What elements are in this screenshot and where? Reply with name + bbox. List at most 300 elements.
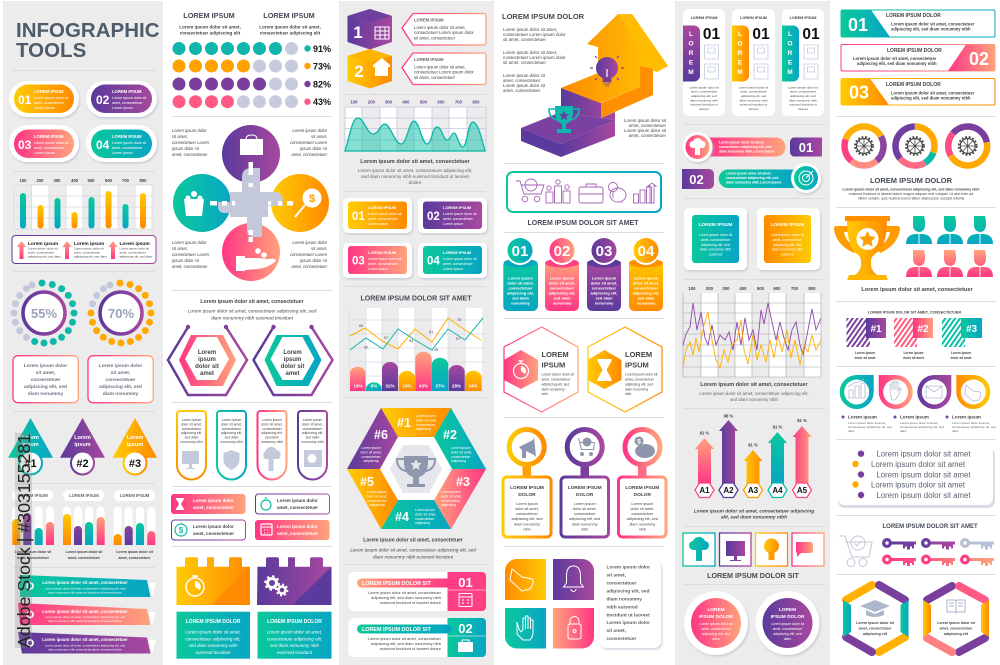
brick cards: Lorem ipsum dolor sit amet, [185, 630, 241, 634]
square note cards: Lorem ipsum dolor sit [699, 233, 732, 237]
label tags: Lorem ipsum dolor [193, 524, 234, 529]
segmented hexagon: dolor sit amet, [366, 494, 388, 498]
circle cards: diam [784, 637, 791, 641]
three lorem tab cards: L [738, 31, 742, 38]
triangle badges: Lorem [22, 435, 39, 441]
heading and text: stair arrow: Lorem ipsum dolor sit [503, 73, 546, 78]
square note cards: diam nonummy nibh [772, 248, 803, 252]
four circle puzzle diagram: ipsum dolor sit [172, 146, 200, 151]
text boxes: diam nonummy [103, 391, 139, 397]
zigzag line chart: 500 [757, 286, 765, 291]
panel: three arrow notes: amet, consectetuer [74, 250, 100, 254]
four icon tiles with text: nibh euismod [606, 604, 638, 610]
segmented hexagon: dolor sit amet, [415, 512, 436, 516]
outlined hexagon cards: diam nonummy [625, 388, 648, 392]
icon strip [507, 172, 661, 212]
icon: hand [236, 248, 276, 271]
heading and text: stair arrow: Lorem ipsum dolor sit amet, [503, 50, 557, 55]
triangle badges: #3 [129, 458, 141, 470]
capsule cards: dolor sit amet, [302, 422, 323, 426]
four circle puzzle diagram: Lorem ipsum dolor [172, 240, 207, 245]
text block: line chart caption: Lorem ipsum dolor sit amet, consectetuer [700, 382, 809, 388]
bullet list panel: Lorem ipsum dolor sit amet [876, 491, 971, 500]
hatched number tags: dolor sit amet [855, 356, 876, 360]
bullet list panel: Lorem ipsum dolor sit amet [876, 450, 971, 458]
cylinder cards: nonummy [511, 300, 531, 306]
segmented hexagon: adipiscing [451, 459, 466, 463]
pill 02: Lorem ipsum [112, 106, 133, 110]
three lorem tab cards: R [738, 50, 743, 57]
icon: presentation board [726, 541, 745, 561]
numbered list cards: Lorem ipsum dolor sit amet, consectetuer [368, 636, 442, 641]
cubes with callouts: sit amet, consectetuer [414, 75, 456, 80]
hatched number tags: Lorem ipsum [903, 351, 924, 355]
circle cards: amet, consectetuer [773, 627, 803, 631]
combined bar and line chart: 65 [359, 324, 363, 328]
donut gear charts [837, 119, 995, 173]
three lorem tab cards: laoreet [749, 107, 758, 111]
icon: piggy bank [634, 436, 655, 458]
four circle puzzle diagram: Lorem ipsum dolor [172, 128, 207, 133]
pill 04 [86, 125, 157, 162]
capsule cards: nonummy nibh [261, 440, 283, 444]
dot ring gauge 55%: 55% [31, 306, 57, 321]
combined bar and line chart: 37% [435, 384, 445, 388]
progress bar groups: Lorem ipsum dolor sit [116, 550, 154, 554]
progress bar groups [12, 490, 155, 560]
outlined hexagon cards: adipiscing elit, sed [542, 382, 569, 386]
numbered list cards: adipiscing elit, sed diam nonummy nibh [371, 641, 441, 646]
combined bar and line chart: 50 [364, 346, 368, 350]
pill 01: Lorem ipsum dolor sit [34, 96, 68, 100]
square note cards: adipiscing elit, sed [773, 243, 802, 247]
heading and text: stair arrow: Lorem ipsum dolor sit [624, 118, 667, 123]
numbered list cards: euismod tincidunt ut laoreet dolore [380, 600, 442, 605]
three lorem tab cards: 01 [703, 26, 720, 43]
segmented hexagon: Lorem ipsum [451, 446, 471, 450]
arrow chart [695, 414, 812, 498]
three lorem tab cards: adipiscing elit, sed [741, 94, 766, 98]
teardrop icons: Lorem ipsum [848, 415, 877, 420]
text boxes: consectetuer [31, 377, 61, 383]
brick cards: Lorem ipsum dolor sit amet, [267, 630, 322, 634]
ribbons: Lorem ipsum dolor sit amet, consectetuer adipiscing elit, sed [45, 586, 126, 590]
numbered banners: 02 [969, 49, 989, 69]
numbered list cards [348, 572, 486, 657]
heading: LOREM IPSUM DOLOR SIT AMET [882, 524, 978, 530]
panel: four numbered cards: Lorem ipsum dolor sit [443, 257, 476, 261]
cubes with callouts: LOREM IPSUM [414, 57, 444, 62]
combined bar and line chart: 24% [468, 384, 478, 388]
progress bar groups: amet, consectetuer [68, 556, 101, 560]
numbered banners: adipiscing elit, sed diam nonummy nibh [857, 61, 937, 66]
ribbon rows with icons [682, 132, 822, 193]
pill 03: 03 [18, 138, 32, 152]
dot matrix with percentages: Lorem ipsum dolor sit amet, [179, 24, 241, 30]
progress bar groups: amet, consectetuer [119, 556, 151, 560]
three lorem tab cards: laoreet [798, 107, 808, 111]
pin cards: nibh [581, 528, 588, 532]
heading and text: stair arrow: consectetuer Lorem ipsum dolor [503, 55, 566, 60]
combined bar and line chart: 57 [384, 336, 388, 340]
icon: calendar [459, 594, 472, 606]
three lorem tab cards: amet, consectetuer [790, 90, 816, 94]
hatched number tags: Lorem ipsum [951, 351, 971, 355]
hexagon ring right [923, 586, 989, 652]
combined bar and line chart: 53 [409, 339, 413, 343]
label tags: Lorem ipsum dolor [277, 498, 318, 503]
cylinder cards: 01 [512, 243, 528, 260]
text block: line chart caption: Lorem ipsum dolor sit amet, consectetuer adipiscing elit, [699, 391, 809, 396]
four circle puzzle diagram: amet, consectetuer [291, 152, 328, 157]
text block: area chart caption: dolore [409, 180, 422, 185]
pill 04: 04 [96, 138, 110, 152]
numbered banners: adipiscing elit, sed diam nonummy nibh [891, 96, 971, 100]
arrow chart: A2 [723, 486, 734, 495]
brick cards [176, 557, 332, 659]
four circle puzzle diagram: ipsum dolor sit [300, 258, 328, 263]
panel: four numbered pills [9, 81, 157, 162]
cylinder cards: consectetuer [592, 286, 617, 290]
numbered list cards: LOREM IPSUM DOLOR SIT [362, 581, 432, 587]
square note cards: euismod [781, 252, 794, 256]
triangle badges [8, 418, 157, 474]
arrow chart: 81 % [700, 430, 710, 436]
three lorem tab cards: euismod tincidunt ut [690, 102, 718, 106]
cart and keys [839, 536, 994, 566]
triangle badges: #2 [76, 458, 89, 470]
cylinder cards: sed diam [554, 296, 571, 300]
cylinder cards: 03 [596, 243, 612, 260]
triangle badges: ipsum [74, 442, 91, 448]
capsule cards: adipiscing elit, [302, 431, 323, 435]
cylinder cards: dolor sit amet, [591, 280, 617, 286]
brick cards: LOREM IPSUM DOLOR [267, 619, 322, 625]
three lorem tab cards: diam nonummy nibh [789, 98, 817, 102]
three lorem tab cards: Lorem ipsum dolor sit [788, 86, 818, 90]
segmented hexagon: #4 [395, 510, 409, 524]
text block: arrow chart caption: elit, sed diam nonummy nibh [721, 514, 787, 520]
icon: speech bubbles [796, 542, 813, 557]
four circle puzzle diagram: Lorem ipsum dolor [292, 240, 328, 245]
heading and text: stair arrow: LOREM IPSUM DOLOR [502, 12, 585, 21]
panel: four numbered cards [343, 198, 487, 278]
cubes with callouts: consectetuer Lorem ipsum dolor [414, 70, 474, 74]
three lorem tab cards: M [737, 69, 743, 76]
icon: raised hand [890, 381, 901, 400]
area chart [345, 100, 486, 151]
brick cards: consectetuer adipiscing elit, [267, 636, 322, 642]
heading and text: stair arrow: sit amet, consectetuer [503, 60, 546, 65]
numbered list cards: Lorem ipsum dolor sit amet, consectetuer [368, 590, 442, 595]
ribbon rows with icons: Lorem ipsum dolor sit amet, [726, 172, 771, 176]
four circle puzzle diagram: amet, consectetuer [172, 152, 208, 157]
heading and text: stair arrow: amet, consectetuer [629, 133, 667, 138]
trophy illustration [834, 216, 900, 280]
ribbon rows with icons: diam nonummy nibh.Lorem ipsum [719, 150, 774, 154]
square note cards: LOREM IPSUM [771, 222, 804, 228]
hexagon callouts: amet [285, 371, 300, 377]
four icon tiles with text: Lorem ipsum dolor [606, 564, 650, 570]
icon: raised hand [517, 616, 533, 640]
hexagon ring left [843, 585, 908, 652]
icon: bar growth [848, 379, 865, 398]
pill 04: Lorem ipsum dolor sit [112, 141, 146, 145]
watermark: Adobe Stock | #303155281 [14, 434, 34, 648]
cylinder cards: adipiscing elit, [507, 290, 534, 296]
icon: bell [564, 566, 584, 592]
cylinder cards: Lorem ipsum [634, 276, 659, 280]
segmented hexagon: #6 [374, 428, 388, 442]
segmented hexagon: consectetuer [441, 499, 461, 503]
arrow chart: 81 % [773, 424, 783, 430]
three lorem tab cards: R [689, 50, 694, 57]
hexagon ring left: adipiscing elit [863, 632, 888, 636]
segmented hexagon: Lorem ipsum [441, 490, 461, 494]
three lorem tab cards: LOREM IPSUM [691, 16, 717, 20]
circle cards: adipiscing elit, sed [773, 632, 802, 636]
combined bar and line chart: 32% [385, 384, 395, 388]
icon: briefcase [579, 184, 603, 203]
cylinder cards: 04 [638, 243, 655, 260]
capsule cards: sed diam [265, 436, 279, 440]
square note cards: LOREM IPSUM [699, 222, 732, 228]
icon: monitor [182, 451, 199, 469]
square note cards: diam nonummy nibh [700, 248, 731, 252]
pill 04: Lorem ipsum [112, 151, 133, 155]
hexagon callouts: ipsum [198, 357, 216, 363]
zigzag line chart: 100 [688, 286, 696, 291]
text block: hexagon caption: Lorem ipsum dolor sit amet, consectetuer adipiscing elit, sed [350, 548, 476, 552]
three lorem tab cards: amet, consectetuer [691, 90, 717, 94]
bar chart: column one: 400 [71, 178, 79, 183]
capsule cards: consectetuer [303, 427, 323, 431]
progress bar groups: LOREM IPSUM [18, 493, 48, 498]
segmented hexagon: adipiscing [363, 459, 379, 463]
brick cards: sed diam nonummy nibh [270, 643, 320, 648]
outlined hexagon cards: Lorem ipsum dolor sit [542, 372, 574, 376]
segmented hexagon: consectetuer [367, 499, 388, 503]
ribbons: Lorem ipsum dolor sit amet, consectetuer [42, 637, 128, 642]
three lorem tab cards: O [688, 40, 694, 48]
text boxes: Lorem ipsum dolor [99, 363, 142, 369]
teardrop icons: Lorem ipsum dolor sit amet, [848, 421, 886, 425]
panel: four numbered cards: LOREM IPSUM [443, 250, 472, 255]
dot matrix with percentages: 91% [313, 44, 331, 54]
four circle puzzle diagram: Lorem ipsum dolor [292, 128, 328, 133]
pill 03: amet, consectetuer [34, 146, 65, 150]
area chart: 800 [472, 100, 480, 104]
panel: four numbered cards: Lorem ipsum dolor sit [443, 212, 476, 216]
square note cards: amet, consectetuer [773, 238, 803, 242]
heading: LOREM IPSUM DOLOR SIT AMET [361, 296, 472, 302]
combined bar and line chart: 75 [457, 318, 461, 322]
hatched number tags: LOREM IPSUM DOLOR SIT AMET, CONSECTETUER [868, 310, 961, 314]
icon: trophy [397, 456, 435, 487]
icon: gears [265, 576, 288, 596]
cylinder cards: Lorem ipsum [592, 276, 617, 280]
icon: light bulb [590, 56, 624, 86]
progress bar groups: LOREM IPSUM [69, 493, 99, 498]
ribbons [18, 575, 156, 654]
teardrop icons: Lorem ipsum dolor sit amet, [900, 421, 938, 425]
text block: area chart caption: Lorem ipsum dolor sit amet, consectetuer [360, 159, 471, 165]
bullet list panel [838, 446, 995, 508]
text block: donut caption: minim veniam, quis nostrud exerci tation ullamcorper suscipit lobortis [858, 196, 965, 200]
icon: cloud [690, 138, 706, 155]
numbered list cards: 02 [458, 621, 473, 636]
square note cards: adipiscing elit, sed [701, 243, 730, 247]
heading and text: stair arrow: Lorem ipsum dolor sit [503, 83, 546, 88]
pill 01: amet, consectetuer [34, 101, 65, 105]
pin cards: adipiscing elit, sed [511, 517, 543, 521]
cylinder cards: dolor sit amet, [549, 280, 575, 286]
combined bar and line chart: 18% [353, 384, 363, 388]
triangle badges: ipsum [22, 442, 39, 448]
panel: four numbered cards: Lorem ipsum [443, 222, 463, 226]
combined bar and line chart [349, 308, 484, 391]
hexagon callouts: Lorem [283, 350, 302, 356]
label tags: Lorem ipsum dolor [277, 524, 318, 529]
panel: four numbered cards: 02 [427, 211, 440, 223]
zigzag line chart: 400 [739, 286, 747, 291]
bar chart: column one: 200 [36, 178, 44, 183]
icon: house [373, 58, 390, 76]
ribbons: diam nonummy nibh euismod tincidunt ut laoreet dolore [48, 619, 122, 623]
combined bar and line chart: 57 [456, 337, 460, 341]
cubes with callouts: Lorem ipsum dolor sit amet, [414, 64, 466, 70]
numbered list cards: 01 [458, 575, 473, 590]
text block: area chart caption: sed diam nonummy nibh euismod tincidunt ut laoreet [361, 174, 469, 179]
panel: four numbered cards: Lorem ipsum dolor sit [368, 212, 401, 216]
icon: stopwatch [186, 576, 204, 596]
text boxes: Lorem ipsum dolor [24, 363, 67, 369]
pill 04: amet, consectetuer [112, 146, 143, 150]
ribbon rows with icons: 01 [799, 140, 813, 155]
ribbons: Lorem ipsum dolor sit amet, consectetuer [42, 609, 128, 614]
pill 03: LOREM IPSUM [34, 134, 64, 139]
heading and text: stair arrow: consectetuer Lorem ipsum dolor [503, 32, 566, 37]
icon: stopwatch [514, 361, 528, 378]
three lorem tab cards: L [689, 31, 693, 38]
zigzag line chart: 300 [722, 286, 730, 291]
area chart: 600 [437, 100, 445, 104]
segmented hexagon: adipiscing [369, 503, 385, 507]
icon: dollar coin [175, 524, 187, 536]
circle cards: IPSUM DOLOR [771, 614, 805, 620]
arrow chart: A3 [748, 486, 759, 495]
numbered banners: 01 [848, 15, 868, 35]
segmented hexagon: consectetuer [415, 517, 435, 521]
brick cards: LOREM IPSUM DOLOR [186, 619, 241, 625]
text boxes: consectetuer [106, 377, 136, 383]
dot matrix with percentages: consectetuer adipiscing elit [260, 30, 321, 36]
icon: briefcase [240, 135, 263, 155]
area chart: 700 [455, 100, 463, 104]
circle cards [684, 591, 820, 655]
capsule cards: nonummy nibh [301, 440, 324, 444]
segmented hexagon: adipiscing [416, 427, 431, 431]
three lorem tab cards: L [788, 31, 792, 38]
cylinder cards: consectetuer [508, 286, 533, 290]
text block: trophy caption: Lorem ipsum dolor sit amet, consectetuer [861, 287, 973, 293]
pin cards: dolor sit amet, [573, 507, 597, 511]
icon: cloud ladder [689, 537, 709, 561]
progress bar groups: amet, consectetuer [17, 556, 50, 560]
capsule cards: dolor sit amet, [181, 422, 202, 426]
pin cards: DOLOR [634, 492, 651, 498]
heading: LOREM IPSUM DOLOR SIT [707, 571, 800, 580]
hexagon ring right: amet, consectetuer [940, 626, 973, 630]
panel: four numbered cards: amet, consectetuer [368, 262, 399, 266]
outlined hexagon cards: adipiscing elit, sed [625, 382, 653, 386]
pin cards: Lorem ipsum [574, 502, 596, 506]
dot matrix with percentages: consectetuer adipiscing elit [180, 30, 241, 36]
panel: four numbered cards: Lorem ipsum dolor sit [368, 257, 401, 261]
brick cards: euismod tincidunt [277, 650, 313, 655]
icon: pointing hand [965, 385, 981, 401]
capsule cards: adipiscing elit, [181, 431, 202, 435]
label tags: Lorem ipsum dolor [193, 498, 234, 503]
three lorem tab cards: M [787, 69, 793, 76]
circle cards: LOREM [779, 607, 796, 613]
pin cards: consectetuer [631, 512, 654, 516]
pill 03 [9, 125, 79, 162]
segmented hexagon [347, 408, 486, 529]
pill 04: LOREM IPSUM [112, 134, 142, 139]
panel: three arrow notes: adipiscing elit, sed diam [28, 254, 61, 258]
arrow chart: 81 % [748, 442, 758, 448]
cylinder cards: consectetuer [634, 286, 659, 290]
icon: calendar [261, 524, 272, 535]
icon: padlock [568, 616, 581, 639]
numbered list cards: LOREM IPSUM DOLOR SIT [362, 627, 432, 633]
hexagon callouts [168, 325, 332, 395]
three lorem tab cards: LOREM IPSUM [790, 16, 816, 20]
icon: safe [304, 450, 322, 467]
capsule cards: dolor sit amet, [261, 422, 283, 426]
capsule cards [177, 411, 327, 480]
pin cards: consectetuer [574, 512, 596, 516]
segmented hexagon: #3 [456, 475, 470, 489]
hexagon ring right: Lorem ipsum dolor sit [937, 621, 976, 625]
dot ring gauge 70% [88, 280, 154, 346]
pin cards: LOREM IPSUM [568, 485, 602, 491]
cylinder cards: dolor sit amet, [633, 280, 659, 286]
pin cards: Lorem ipsum [631, 502, 653, 506]
hatched number tags [846, 310, 982, 360]
text block: line chart caption: sed diam nonummy nibh [730, 397, 778, 402]
heading and text: stair arrow: amet, consectetuer [503, 78, 541, 83]
ribbons: Lorem ipsum dolor sit amet, consectetuer [42, 580, 128, 585]
pill 02: amet, consectetuer [112, 101, 143, 105]
outlined hexagon cards: IPSUM [625, 360, 649, 370]
pill 01 [9, 81, 79, 117]
dot matrix with percentages: 82% [313, 80, 331, 90]
numbered banners [841, 10, 995, 105]
teardrop icons: diam [848, 429, 855, 433]
combined bar and line chart: 24% [402, 384, 412, 388]
panel: four numbered cards: Lorem ipsum [368, 267, 388, 271]
numbered banners: LOREM IPSUM DOLOR [887, 48, 942, 54]
heading and text: stair arrow: Lorem ipsum dolor sit [624, 128, 667, 133]
panel: four numbered cards: Lorem ipsum [368, 222, 388, 226]
three lorem tab cards: R [788, 50, 793, 57]
pin cards: adipiscing elit, sed [627, 517, 658, 521]
outlined hexagon cards: amet, consectetuer [542, 378, 571, 382]
text boxes: adipiscing elit, sed [24, 384, 67, 390]
panel: three arrow notes: amet, consectetuer [28, 250, 54, 254]
